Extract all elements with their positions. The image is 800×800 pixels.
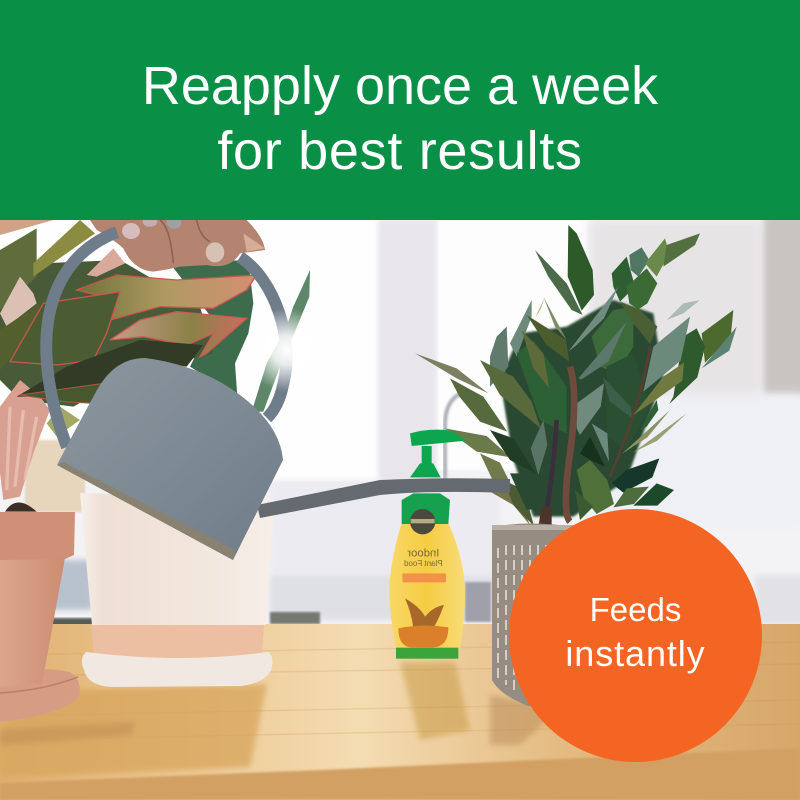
title: for best results — [217, 121, 583, 181]
terracotta pot with saucer — [0, 512, 80, 722]
sun flare — [245, 308, 329, 392]
can body — [57, 358, 283, 560]
right plant: zz plant — [415, 225, 737, 527]
title — [142, 56, 658, 181]
badge text — [565, 591, 706, 674]
photo: watering a houseplant — [0, 220, 800, 800]
can spout — [257, 478, 510, 518]
bottle of plant food — [389, 430, 467, 659]
badge text: instantly — [565, 633, 706, 674]
can rim — [57, 462, 235, 560]
can handle — [46, 232, 286, 447]
title: Reapply once a week — [142, 56, 658, 116]
badge: orange circle — [509, 509, 762, 762]
wooden table — [0, 624, 800, 800]
bottle of plant food: Plant Food — [404, 559, 443, 568]
panel: green header — [0, 0, 800, 220]
hand holding the can — [0, 217, 265, 272]
bottle of plant food: Indoor — [407, 548, 439, 560]
patterned stone pot — [492, 524, 575, 710]
watering can — [46, 232, 510, 560]
window and kitchen background — [0, 215, 800, 630]
white and terracotta pot — [80, 493, 275, 687]
badge text: Feeds — [590, 591, 681, 628]
left plant: red-green leaves — [0, 220, 310, 512]
